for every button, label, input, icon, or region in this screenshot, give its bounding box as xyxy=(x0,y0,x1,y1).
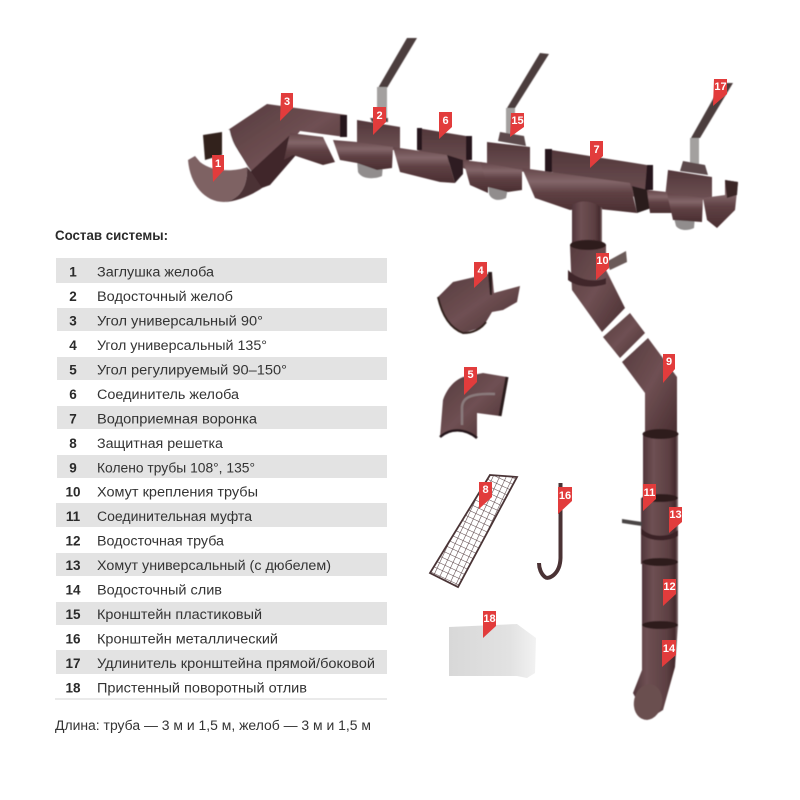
row 1: 1 xyxy=(69,264,77,280)
illustration: downpipe xyxy=(568,240,678,723)
part 18: wall outlet xyxy=(449,624,536,678)
flag 13 xyxy=(669,507,682,533)
row 12: 12 xyxy=(65,534,81,549)
flag 11 xyxy=(643,484,656,511)
flag 10: 10 xyxy=(596,255,609,267)
row 2: Водосточный желоб xyxy=(97,289,233,304)
flag 15: 15 xyxy=(511,115,524,127)
bracket straps xyxy=(377,38,733,168)
row 9: Колено трубы 108°, 135° xyxy=(97,460,255,475)
flag 16: 16 xyxy=(559,490,571,502)
flag 2 xyxy=(373,107,386,135)
flag 11: 11 xyxy=(644,487,655,499)
row 8: Защитная решетка xyxy=(97,436,224,451)
end cap xyxy=(188,132,262,202)
corner 90 xyxy=(228,104,347,196)
metal hangers below gutter xyxy=(357,160,695,230)
flag 12: 12 xyxy=(663,581,676,593)
flag 15 xyxy=(510,113,524,137)
flag 2: 2 xyxy=(376,110,383,122)
part 16: metal bracket xyxy=(539,483,560,578)
row 8: 8 xyxy=(69,436,77,451)
flag 7 xyxy=(590,141,603,168)
outlet xyxy=(633,625,678,720)
illustration: gutter assembly xyxy=(188,38,738,246)
flag 4 xyxy=(474,262,487,288)
row 1: Заглушка желоба xyxy=(97,264,215,280)
flag 1 xyxy=(212,155,224,182)
row 14: 14 xyxy=(65,583,81,598)
flag 5 xyxy=(464,367,477,395)
flag 10 xyxy=(596,253,609,280)
gutter front sections xyxy=(284,133,738,228)
row 10: 10 xyxy=(65,485,81,500)
flag 17 xyxy=(713,79,727,106)
row 16: 16 xyxy=(65,632,81,646)
row 11: Соединительная муфта xyxy=(97,509,253,524)
flag 6 xyxy=(439,112,452,139)
row 5: 5 xyxy=(69,362,77,377)
lower elbow xyxy=(622,338,677,436)
flag 13: 13 xyxy=(669,509,682,521)
flag 18: 18 xyxy=(483,613,496,625)
funnel neck xyxy=(572,202,602,246)
flag 9 xyxy=(663,354,675,383)
heading: system composition: Состав системы: xyxy=(55,228,168,243)
flag 4: 4 xyxy=(477,265,484,277)
row 3: Угол универсальный 90° xyxy=(97,313,263,328)
row 9: 9 xyxy=(69,460,77,475)
row 13: Хомут универсальный (с дюбелем) xyxy=(97,558,331,573)
flag 16 xyxy=(558,487,572,514)
flag 3: 3 xyxy=(284,96,290,108)
flag 14 xyxy=(662,640,676,667)
row 11: 11 xyxy=(66,509,81,524)
row 5: Угол регулируемый 90–150° xyxy=(97,362,287,377)
flag 3 xyxy=(280,93,293,121)
flag 12 xyxy=(663,579,676,606)
row 12: Водосточная труба xyxy=(97,534,225,549)
row 6: 6 xyxy=(69,387,77,402)
row 18: Пристенный поворотный отлив xyxy=(97,680,307,696)
row 14: Водосточный слив xyxy=(97,583,222,598)
row 17: Удлинитель кронштейна прямой/боковой xyxy=(97,656,375,671)
row 2: 2 xyxy=(69,289,77,304)
table: parts list xyxy=(55,258,387,700)
middle pipe segment xyxy=(603,313,645,358)
flag 8 xyxy=(479,482,492,509)
row 18: 18 xyxy=(65,680,81,696)
downpipe xyxy=(642,562,678,627)
flag 1: 1 xyxy=(215,158,221,170)
part 8: protective mesh xyxy=(430,475,517,587)
flag 18 xyxy=(483,611,496,638)
row 7: 7 xyxy=(69,411,77,426)
row 4: Угол универсальный 135° xyxy=(97,338,267,353)
row 15: Кронштейн пластиковый xyxy=(97,607,262,622)
row 15: 15 xyxy=(65,607,81,622)
pipe section xyxy=(643,433,678,500)
row 10: Хомут крепления трубы xyxy=(97,485,258,500)
part 5: adjustable corner xyxy=(440,373,507,438)
row 4: 4 xyxy=(69,338,77,353)
row 17: 17 xyxy=(65,656,81,671)
flag 14: 14 xyxy=(663,643,676,655)
part 4: corner 135 xyxy=(438,272,520,333)
flag 7: 7 xyxy=(593,144,600,156)
row 6: Соединитель желоба xyxy=(97,387,240,402)
coupler and clamp xyxy=(641,498,678,564)
flag 9: 9 xyxy=(666,356,672,368)
row 3: 3 xyxy=(69,313,77,328)
upper elbow xyxy=(570,241,625,332)
length note: Длина: труба — 3 м и 1,5 м, желоб — 3 м и 1,5 м xyxy=(55,718,371,733)
flag 17: 17 xyxy=(714,81,727,93)
row 7: Водоприемная воронка xyxy=(97,411,258,426)
flag 5: 5 xyxy=(467,369,474,381)
gutter back plates xyxy=(357,118,712,200)
row 13: 13 xyxy=(65,558,81,573)
row 16: Кронштейн металлический xyxy=(97,632,278,646)
flag 6: 6 xyxy=(442,115,449,127)
flag 8: 8 xyxy=(482,484,489,496)
